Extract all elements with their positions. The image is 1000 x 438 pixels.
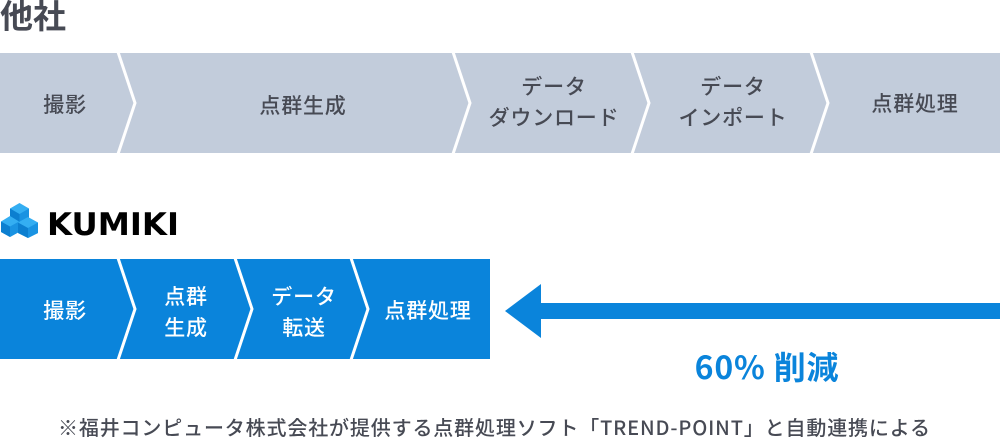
step: point cloud processing: 点群処理 bbox=[384, 295, 472, 325]
step: data download: データ bbox=[521, 71, 587, 101]
step: point cloud processing: 点群処理 bbox=[871, 88, 959, 118]
logo wordmark: KUMIKI: KUMIKI bbox=[47, 207, 179, 243]
step: shooting: 撮影 bbox=[43, 295, 87, 325]
icon: KUMIKI cubes logo bbox=[1, 203, 38, 238]
arrow: time reduction bbox=[505, 284, 1000, 338]
step: point cloud generation: 点群生成 bbox=[259, 90, 347, 120]
step: point cloud generation: 生成 bbox=[164, 312, 208, 342]
step: data download: ダウンロード bbox=[489, 102, 619, 132]
panel: KUMIKI process flow bbox=[0, 258, 490, 360]
step: data import: データ bbox=[700, 71, 766, 101]
step: data import: インポート bbox=[678, 102, 788, 132]
step: shooting: 撮影 bbox=[43, 89, 87, 119]
callout: 60% reduction: 60% 削減 bbox=[695, 343, 839, 389]
step: data transfer: 転送 bbox=[282, 312, 326, 342]
step: point cloud generation: 点群 bbox=[164, 281, 208, 311]
step: data transfer: データ bbox=[271, 281, 337, 311]
panel: other companies process flow bbox=[0, 52, 1000, 154]
